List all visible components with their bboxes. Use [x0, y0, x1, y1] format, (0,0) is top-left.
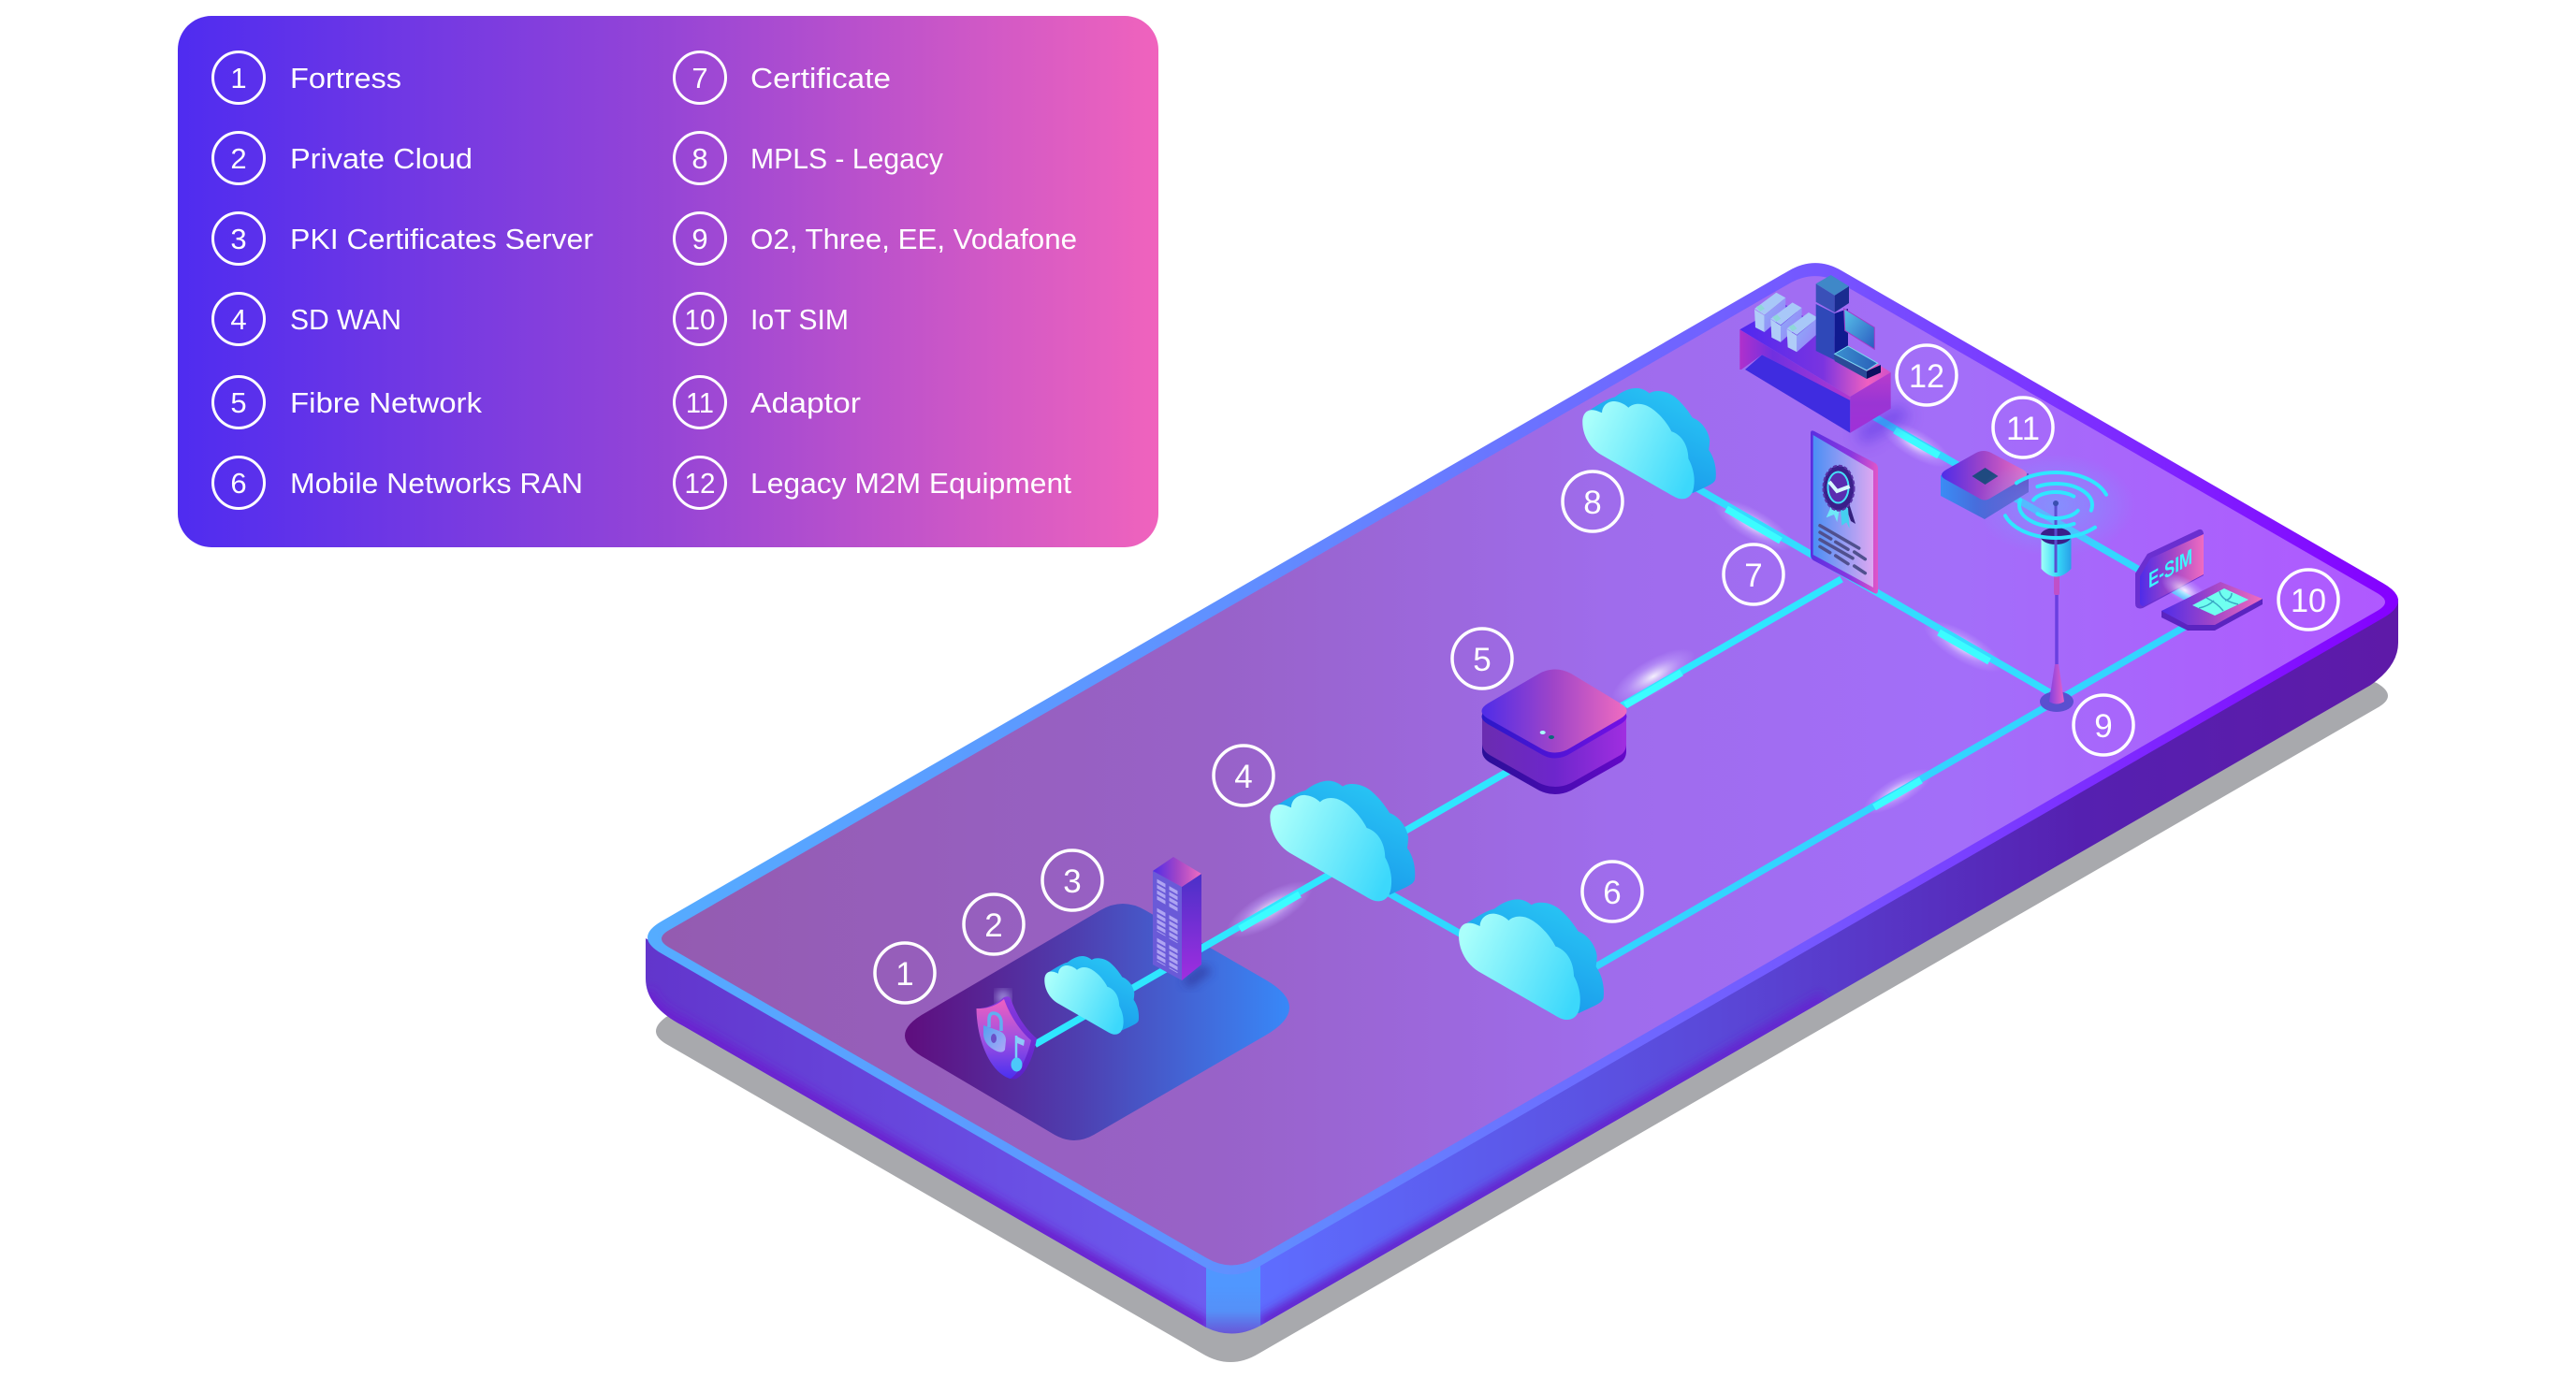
certificate frame — [1811, 430, 1878, 594]
marker 11: 11 — [2006, 411, 2040, 447]
legend item 5: 5 — [230, 386, 247, 419]
legend item 9 — [674, 213, 1077, 264]
table shadow — [1857, 404, 1911, 445]
ribbons — [1826, 503, 1856, 529]
legend item 3: 3 — [230, 223, 247, 255]
legend item 4: SD WAN — [290, 303, 401, 336]
marker 7 — [1724, 544, 1783, 604]
glow — [1916, 611, 2010, 682]
legend item 4: 4 — [230, 303, 247, 336]
marker 2: 2 — [984, 907, 1003, 944]
key — [1015, 1036, 1017, 1059]
terminal column — [1816, 275, 1881, 379]
legend item 6: Mobile Networks RAN — [290, 467, 583, 500]
servers — [1754, 293, 1818, 352]
marker 1 — [875, 943, 935, 1003]
legend item 5: Fibre Network — [290, 386, 483, 419]
front corner band — [1206, 1263, 1260, 1334]
line glows — [1219, 413, 2010, 949]
left face bottom shading — [646, 992, 1206, 1327]
bright line sections — [1240, 430, 1989, 929]
shield side — [977, 996, 1037, 1080]
icon: E-SIM card: E-SIM — [2148, 544, 2192, 594]
antenna cone — [2049, 664, 2064, 704]
marker 4 — [1214, 746, 1273, 805]
isometric platform — [646, 263, 2398, 1334]
marker 3: 3 — [1063, 863, 1082, 900]
antenna base — [2040, 691, 2074, 712]
signal rings — [2002, 472, 2109, 538]
legend item 1: 1 — [230, 62, 247, 94]
glow — [1707, 489, 1800, 560]
marker 1: 1 — [895, 956, 914, 993]
certificate sheet — [1813, 435, 1873, 587]
glow — [1219, 870, 1320, 949]
legend panel — [178, 16, 1158, 547]
marker 8: 8 — [1583, 485, 1602, 521]
legend item 12 — [674, 457, 1071, 509]
legend item 10: 10 — [685, 303, 715, 336]
fortress pad — [905, 904, 1289, 1140]
right side face — [1260, 599, 2398, 1326]
key bow — [1011, 1057, 1022, 1072]
legend item 3: PKI Certificates Server — [290, 223, 593, 255]
antenna cylinder — [2042, 536, 2072, 576]
icon: legacy M2M equipment — [1739, 275, 1911, 445]
legend item 9: 9 — [691, 223, 708, 255]
icon: certificate — [1811, 430, 1878, 594]
legend item 6: 6 — [230, 467, 247, 500]
legend item 5 — [213, 376, 483, 428]
legend item 10: IoT SIM — [750, 303, 849, 336]
seal — [1823, 466, 1855, 511]
legend item 11 — [674, 376, 861, 428]
legend item 1 — [213, 52, 401, 103]
icon: MPLS cloud — [1582, 388, 1716, 499]
seal ring — [1828, 471, 1849, 503]
marker 9: 9 — [2094, 708, 2113, 745]
icon: fibre network box — [1482, 670, 1626, 794]
legend item 8: 8 — [691, 142, 708, 175]
legend item 10 — [674, 294, 849, 344]
line: fortress to certificate — [1035, 579, 1841, 1044]
marker 12: 12 — [1909, 358, 1944, 395]
icon: E-SIM card — [2135, 529, 2204, 608]
icon: antenna — [1976, 454, 2135, 712]
right face bottom shading — [1260, 1000, 1825, 1326]
marker 5: 5 — [1473, 642, 1492, 678]
icon: fortress shield — [977, 991, 1037, 1080]
line: legacy equipment to E-SIM — [1862, 410, 2199, 604]
icon: mobile networks cloud — [1459, 899, 1604, 1020]
glow — [1857, 761, 1938, 822]
table end — [1850, 372, 1891, 433]
icon: SD WAN cloud — [1270, 781, 1415, 901]
key bit — [1017, 1037, 1025, 1046]
platform shadow — [656, 468, 2388, 1362]
icon: PKI certificates server tower — [1153, 857, 1213, 988]
legend item 6 — [213, 457, 583, 509]
legend item 1: Fortress — [290, 62, 401, 94]
padlock body — [983, 1025, 1006, 1052]
antenna tip — [2055, 503, 2057, 573]
shield face — [977, 999, 1031, 1079]
line: SD WAN to mobile cloud — [1366, 880, 1478, 944]
legend item 2 — [213, 133, 473, 183]
keyhole — [991, 1034, 997, 1043]
marker 6: 6 — [1603, 875, 1622, 911]
table front beam — [1739, 329, 1850, 400]
platform top surface — [662, 276, 2385, 1266]
marker 2 — [964, 894, 1024, 954]
platform rim — [648, 263, 2398, 1274]
legend item 7 — [674, 52, 891, 103]
marker 5 — [1452, 629, 1512, 689]
table underside — [1745, 355, 1850, 433]
line: MPLS to antenna — [1684, 481, 2049, 692]
marker 12 — [1897, 345, 1957, 405]
antenna glow — [1976, 454, 2135, 557]
diagram number markers — [875, 345, 2338, 1003]
glow — [1875, 413, 1957, 476]
shield halo — [997, 991, 1010, 1004]
icon: adaptor — [1941, 451, 2029, 519]
legend item 12: Legacy M2M Equipment — [750, 467, 1071, 500]
marker 8 — [1563, 471, 1623, 531]
table top — [1739, 304, 1891, 397]
legend item 12: 12 — [685, 467, 715, 500]
legend item 4 — [213, 294, 401, 344]
legend item 11: 11 — [686, 386, 714, 419]
marker 10 — [2278, 570, 2338, 630]
icon: IoT SIM card — [2156, 567, 2263, 631]
marker 7: 7 — [1744, 558, 1763, 594]
seal check — [1829, 482, 1850, 491]
legend item 11: Adaptor — [750, 386, 861, 419]
antenna mast — [2055, 594, 2059, 666]
line: mobile cloud to IoT SIM — [1572, 624, 2190, 980]
marker 4: 4 — [1234, 759, 1253, 795]
antenna lower joint — [2054, 573, 2059, 595]
network connection lines — [1035, 410, 2199, 1044]
legend item 7: 7 — [691, 62, 708, 94]
marker 11 — [1993, 398, 2053, 457]
certificate text lines — [1820, 526, 1865, 573]
marker 10: 10 — [2291, 583, 2326, 619]
icon: private cloud — [1044, 956, 1139, 1035]
left side face — [646, 938, 1206, 1327]
marker 9 — [2074, 695, 2133, 755]
legend item 8: MPLS - Legacy — [750, 142, 943, 175]
legend item 8 — [674, 133, 943, 183]
legend item 9: O2, Three, EE, Vodafone — [750, 223, 1077, 255]
legend item 2: Private Cloud — [290, 142, 473, 175]
legend item 7: Certificate — [750, 62, 891, 94]
glow — [1605, 638, 1702, 715]
cylinder top — [2040, 528, 2072, 544]
legend item 3 — [213, 213, 593, 264]
legend item 2: 2 — [230, 142, 247, 175]
padlock shackle — [989, 1013, 1001, 1031]
marker 3 — [1042, 850, 1102, 910]
marker 6 — [1582, 862, 1642, 921]
